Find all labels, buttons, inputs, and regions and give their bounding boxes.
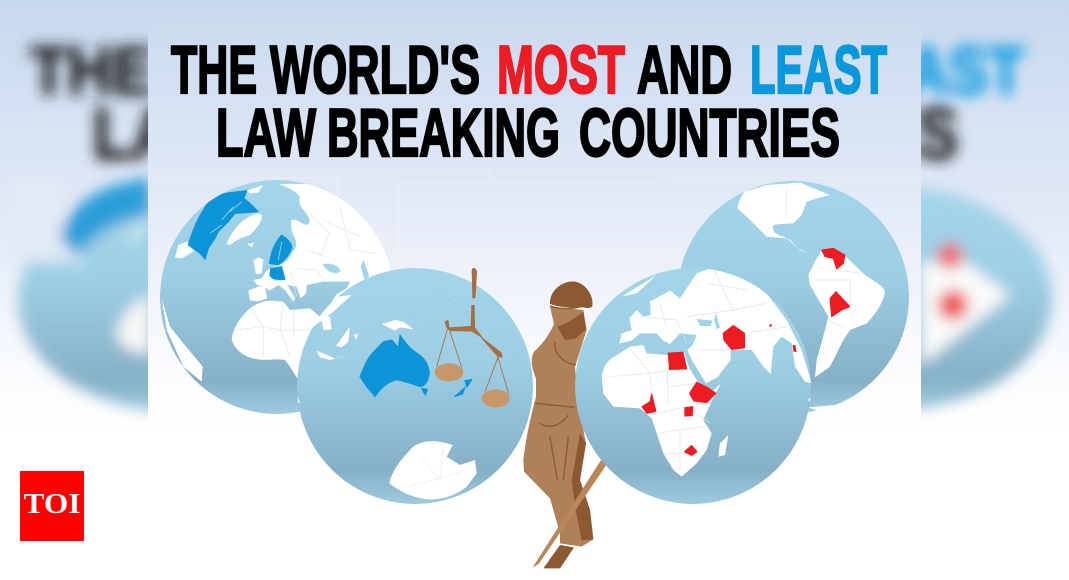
blurred backdrop copy of the artwork: LEAST [830, 33, 1024, 109]
title: LAW [216, 96, 316, 171]
globe: Europe and North America, least law breaking [160, 180, 390, 414]
statue: Lady Justice with scales and sword [435, 268, 607, 568]
title: LEAST [750, 33, 887, 108]
blurred backdrop copy of the artwork: COUNTRIES [600, 92, 958, 175]
title: BREAKING [327, 96, 560, 171]
neck shadow [543, 312, 593, 568]
title: COUNTRIES [579, 96, 840, 171]
blurred backdrop copy of the artwork: THE [30, 33, 153, 109]
blurred backdrop copy of the artwork: LAW [93, 92, 233, 175]
TOI logo: TOI [24, 488, 80, 520]
blurred backdrop copy of the artwork [10, 33, 1052, 412]
title: MOST [497, 33, 625, 108]
globe: Oceania and Antarctica, least law breaking [293, 268, 533, 504]
TOI logo [20, 471, 84, 541]
title [171, 33, 887, 171]
title: AND [637, 33, 732, 108]
title: WORLD'S [270, 33, 480, 108]
sword [533, 460, 607, 567]
figure [523, 307, 593, 547]
page background [0, 0, 1069, 440]
title: THE [171, 33, 257, 108]
globe: Africa and Asia, most law breaking [575, 267, 815, 504]
scales [435, 268, 510, 407]
globe: Americas, most law breaking [677, 181, 909, 413]
central panel [148, 24, 921, 436]
hair [550, 281, 593, 308]
